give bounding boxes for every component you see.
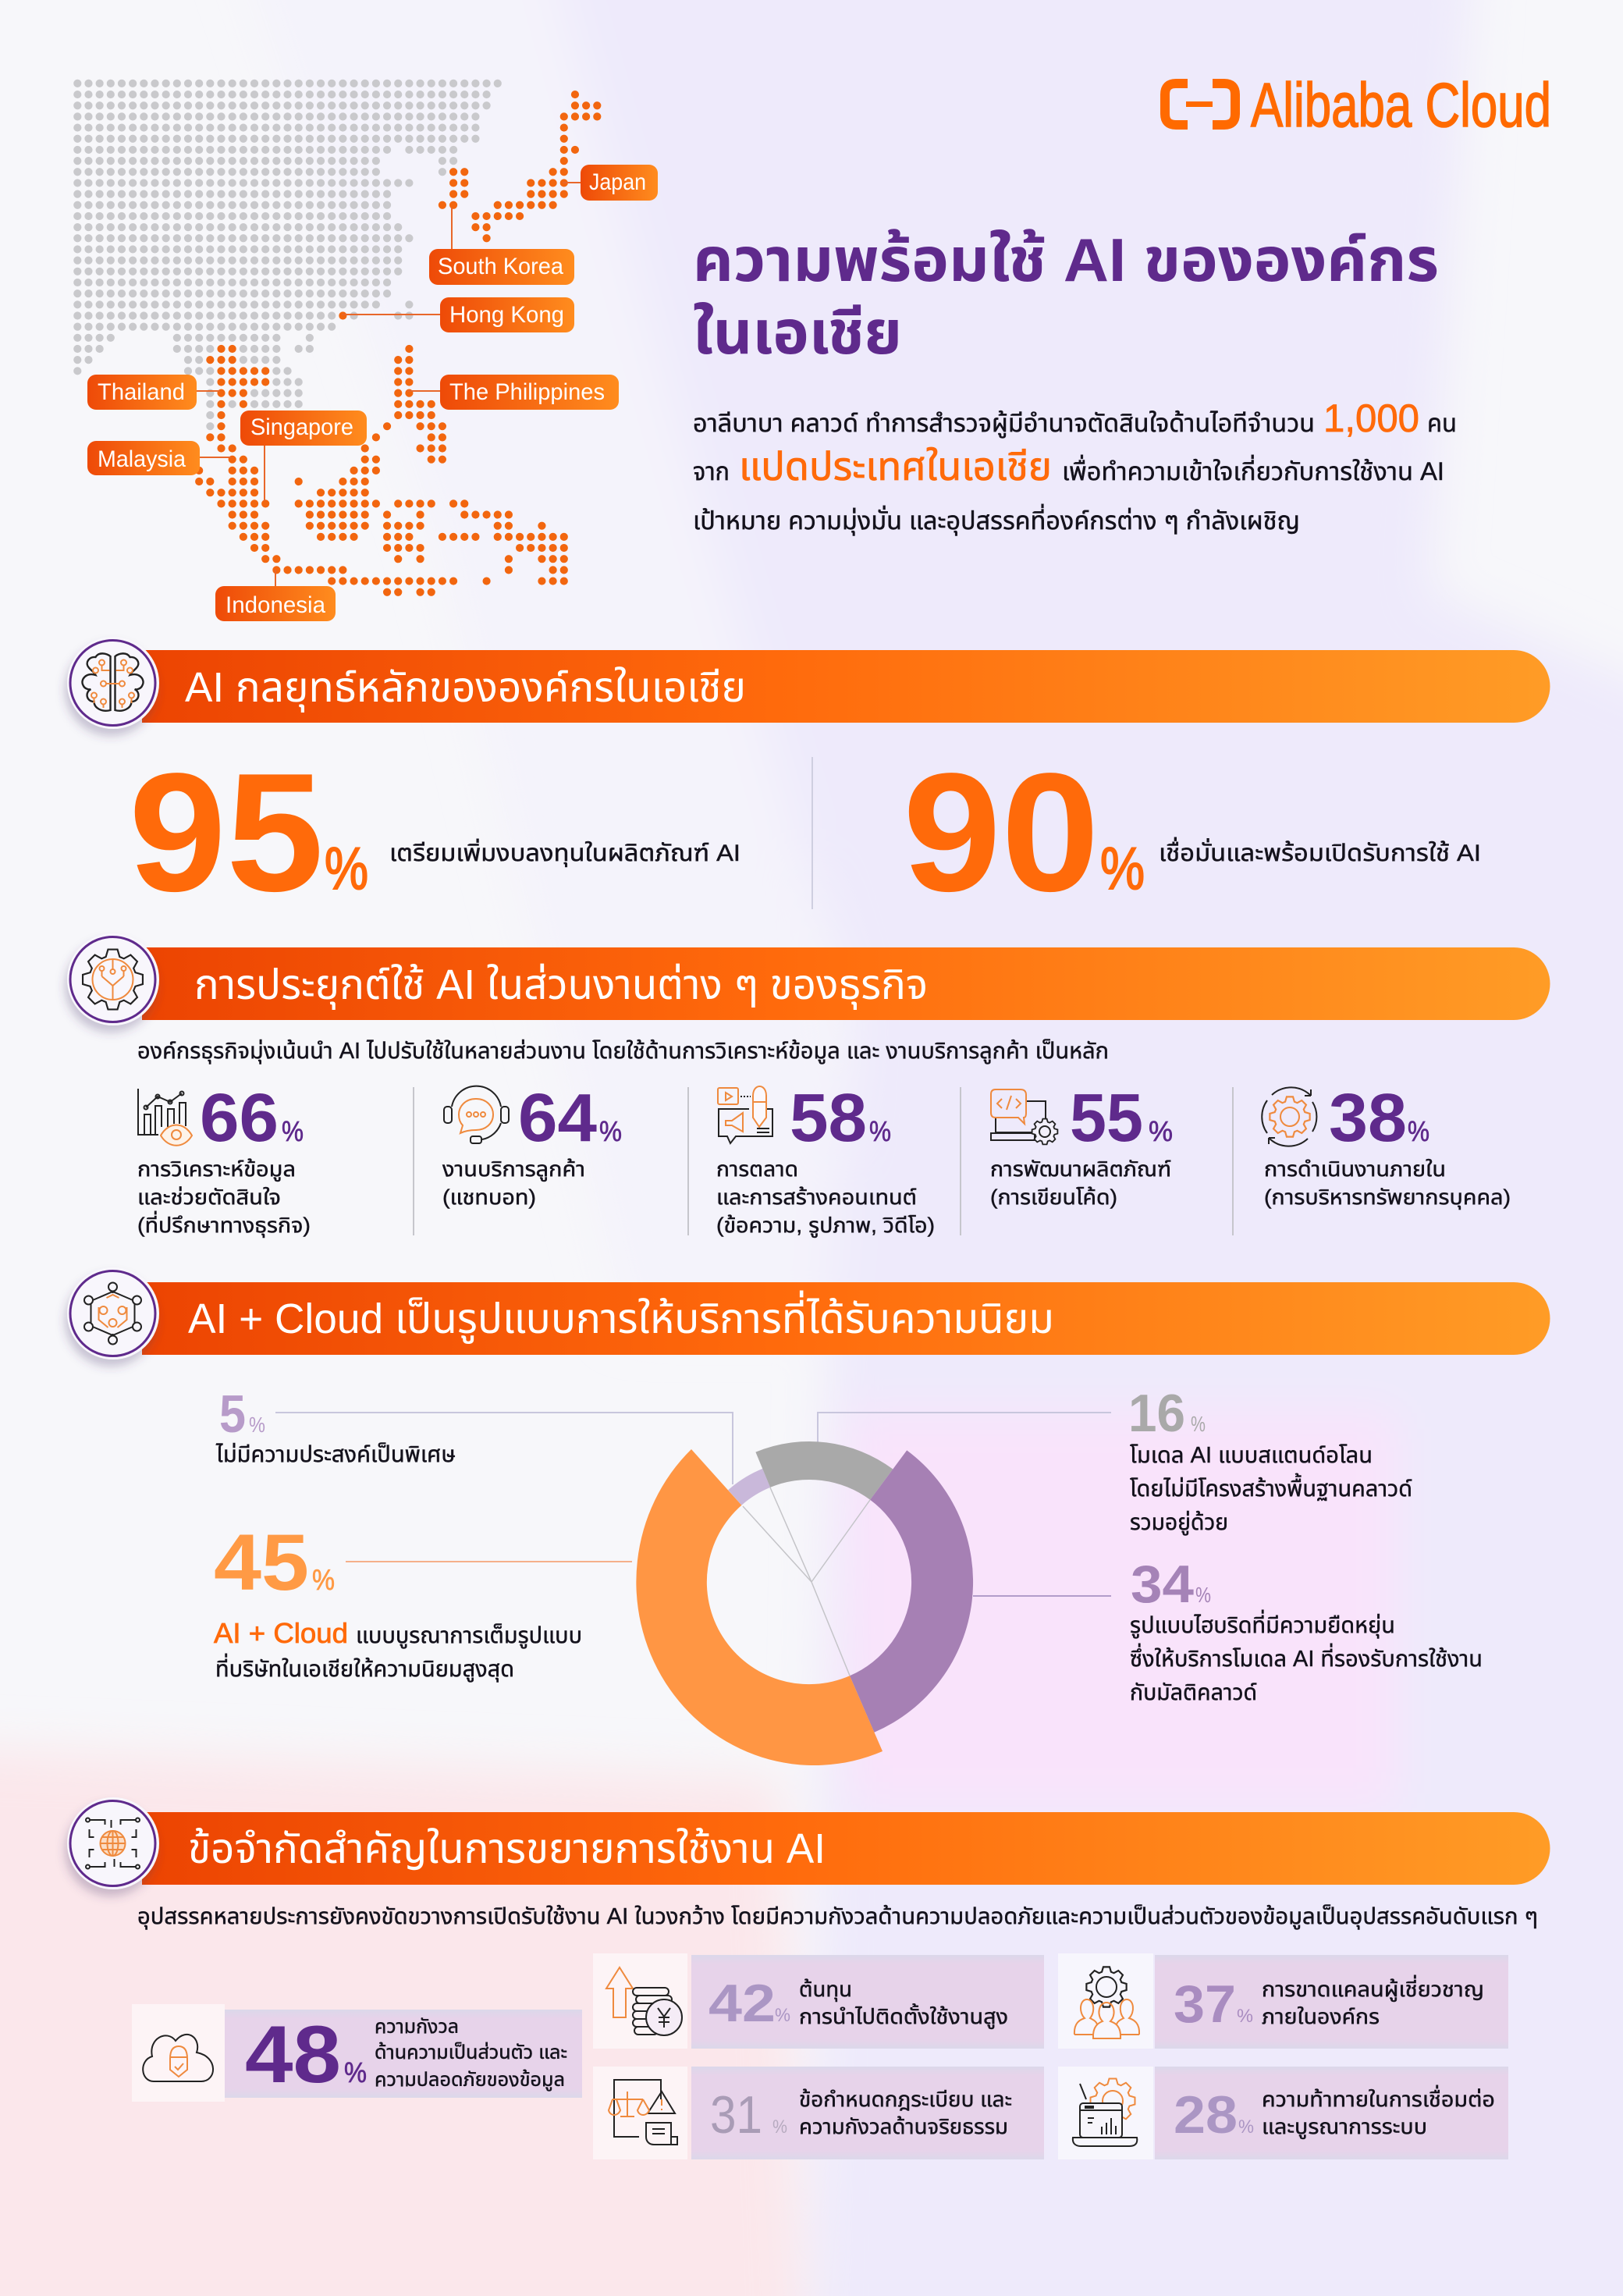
section header 3: AI + Cloud เป็นรูปแบบการให้บริการที่ได้รับความนิยม	[188, 1290, 1054, 1344]
label: Hong Kong	[440, 297, 574, 332]
card: regulation 31%: ข้อกำหนดกฎระเบียบ และ	[799, 2088, 1012, 2111]
stat card: marketing 58%	[716, 1080, 935, 1238]
dotted map of Asia	[77, 84, 658, 621]
icon: network	[67, 1267, 159, 1359]
stat card: product development 55%: 55	[1070, 1080, 1143, 1156]
callout: 45%: AI + Cloud	[214, 1617, 348, 1649]
orange survey country dots	[199, 94, 598, 592]
label: Malaysia: Malaysia	[98, 446, 186, 472]
stat card: product development 55%: (การเขียนโค้ด)	[990, 1185, 1117, 1209]
segment: 5%	[728, 1469, 770, 1505]
stat: 95%: 95	[129, 737, 324, 926]
callout: 34%	[1130, 1555, 1483, 1705]
stat card: customer service 64%: (แชทบอท)	[442, 1185, 536, 1209]
stat card: data analysis 66%: การวิเคราะห์ข้อมูล	[137, 1157, 296, 1182]
section 2 intro text: องค์กรธุรกิจมุ่งเน้นนำ AI ไปปรับใช้ในหลายส่วนงาน โดยใช้ด้านการวิเคราะห์ข้อมูล และ งานบริการลูกค้า เป็นหลัก	[137, 1039, 1109, 1064]
callout: 34%: รูปแบบไฮบริดที่มีความยืดหยุ่น	[1130, 1609, 1395, 1639]
intro text block: อาลีบาบา คลาวด์ ทำการสำรวจผู้มีอำนาจตัดสินใจด้านไอทีจำนวน	[693, 409, 1315, 439]
section header 2	[67, 933, 1550, 1025]
callout: 16%	[1128, 1384, 1412, 1536]
stat card: customer service 64%: 64	[518, 1080, 597, 1156]
icon: globe circuit	[67, 1797, 159, 1889]
intro text block: จาก	[693, 457, 730, 485]
label: Thailand: Thailand	[98, 379, 185, 405]
label: Singapore: Singapore	[250, 414, 353, 440]
card: talent shortage 37%: ภายในองค์กร	[1262, 2005, 1380, 2028]
stat card: customer service 64%: งานบริการลูกค้า	[442, 1157, 585, 1182]
segment: 16%	[755, 1441, 893, 1500]
leader lines	[275, 1413, 1111, 1484]
card: cost 42%	[593, 1953, 1044, 2049]
callout: 5%: 5	[219, 1384, 246, 1444]
callout: 16%: โดยไม่มีโครงสร้างพื้นฐานคลาวด์	[1130, 1473, 1412, 1502]
card: privacy and security 48%: ความปลอดภัยของข้อมูล	[375, 2069, 565, 2092]
section header 4	[67, 1797, 1550, 1889]
section header 2: การประยุกต์ใช้ AI ในส่วนงานต่าง ๆ ของธุรกิจ	[194, 961, 928, 1010]
intro text block: 1,000	[1323, 396, 1419, 440]
stat: 90%: 90	[903, 737, 1099, 926]
callout: 45%: 45	[214, 1518, 309, 1607]
stat: 90%: เชื่อมั่นและพร้อมเปิดรับการใช้ AI	[1159, 837, 1481, 866]
segment: 45%	[636, 1449, 883, 1765]
card: privacy and security 48%: %	[344, 2056, 367, 2088]
label: Singapore	[240, 411, 367, 446]
stat card: internal operations 38%: %	[1408, 1115, 1429, 1147]
card: cost 42%: 42	[709, 1974, 776, 2033]
section header 1: AI กลยุทธ์หลักขององค์กรในเอเชีย	[185, 664, 746, 713]
card: cost 42%: ต้นทุน	[799, 1978, 852, 2002]
card: cost 42%: การนำไปติดตั้งใช้งานสูง	[799, 2003, 1008, 2029]
callout: 16%: โมเดล AI แบบสแตนด์อโลน	[1130, 1443, 1373, 1468]
icon: gear with cycle arrows	[1262, 1087, 1316, 1146]
logo: Alibaba Cloud	[1165, 70, 1551, 140]
card: privacy and security 48%: ความกังวล	[375, 2016, 459, 2038]
donut chart	[275, 1413, 1111, 1765]
stat card: data analysis 66%: (ที่ปรึกษาทางธุรกิจ)	[137, 1210, 311, 1238]
callout: 45%	[214, 1518, 582, 1683]
icon: AI brain	[67, 637, 159, 729]
intro text block: คน	[1427, 409, 1457, 437]
intro text block: เพื่อทำความเข้าใจเกี่ยวกับการใช้งาน AI	[1062, 454, 1444, 485]
stat: 95%	[129, 737, 740, 926]
section header 1	[67, 637, 1550, 729]
title	[693, 226, 1439, 367]
card: integration 28%: %	[1238, 2117, 1254, 2138]
label: The Philippines: The Philippines	[449, 379, 605, 405]
title: ความพร้อมใช้ AI ขององค์กร	[693, 226, 1439, 294]
card: privacy and security 48%: ด้านความเป็นส่วนตัว และ	[375, 2042, 567, 2063]
section header 4: ข้อจำกัดสำคัญในการขยายการใช้งาน AI	[188, 1825, 826, 1872]
stat: 95%: %	[325, 836, 368, 902]
card: privacy and security 48%	[132, 2004, 582, 2102]
card: integration 28%: 28	[1174, 2085, 1238, 2145]
card: privacy and security 48%: 48	[245, 2010, 341, 2100]
label: Hong Kong: Hong Kong	[449, 302, 564, 328]
stat card: internal operations 38%: (การบริหารทรัพยากรบุคคล)	[1264, 1185, 1511, 1210]
callout: 45%: แบบบูรณาการเต็มรูปแบบ	[356, 1623, 582, 1649]
card: regulation 31%: ความกังวลด้านจริยธรรม	[799, 2115, 1008, 2138]
card: regulation 31%: 31	[710, 2085, 762, 2145]
stat: 90%	[903, 737, 1481, 926]
card: cost 42%: %	[775, 2005, 790, 2026]
card: talent shortage 37%: 37	[1174, 1974, 1236, 2034]
callout: 5%	[215, 1384, 456, 1467]
callout: 34%: %	[1195, 1583, 1211, 1607]
grey land dots	[77, 84, 499, 426]
label: Japan: Japan	[589, 169, 646, 195]
label: Thailand	[87, 375, 197, 410]
intro text block	[693, 396, 1457, 535]
stat card: data analysis 66%	[137, 1080, 311, 1238]
stat: 90%: %	[1100, 836, 1145, 902]
icon: AI gear	[67, 933, 159, 1025]
callout: 34%: กับมัลติคลาวด์	[1130, 1680, 1257, 1705]
leader lines	[197, 183, 581, 586]
label: Indonesia	[215, 586, 336, 621]
stat card: marketing 58%: (ข้อความ, รูปภาพ, วิดีโอ)	[716, 1214, 935, 1238]
label: Malaysia	[87, 441, 200, 475]
stat card: marketing 58%: 58	[790, 1080, 867, 1156]
card: regulation 31%	[593, 2067, 1044, 2159]
stat card: product development 55%: %	[1149, 1115, 1173, 1147]
card: integration 28%: และบูรณาการระบบ	[1262, 2115, 1427, 2139]
segment lines	[743, 1487, 870, 1676]
card: talent shortage 37%: การขาดแคลนผู้เชี่ยวชาญ	[1262, 1974, 1484, 2002]
stat card: product development 55%	[990, 1080, 1173, 1209]
stat card: data analysis 66%: และช่วยตัดสินใจ	[137, 1185, 281, 1209]
stat: 95%: เตรียมเพิ่มงบลงทุนในผลิตภัณฑ์ AI	[389, 838, 740, 867]
label: South Korea: South Korea	[438, 254, 563, 279]
section header 3	[67, 1267, 1550, 1359]
card: integration 28%: ความท้าทายในการเชื่อมต่อ	[1262, 2085, 1495, 2111]
stat card: marketing 58%: การตลาด	[716, 1157, 798, 1181]
segment: 34%	[850, 1450, 973, 1733]
stat card: internal operations 38%: การดำเนินงานภายใน	[1264, 1157, 1446, 1181]
intro text block: แปดประเทศในเอเชีย	[739, 445, 1052, 489]
stat card: data analysis 66%: 66	[200, 1080, 279, 1156]
callout: 16%: %	[1191, 1412, 1206, 1436]
icon: chart and eye	[138, 1089, 192, 1146]
intro text block: เป้าหมาย ความมุ่งมั่น และอุปสรรคที่องค์กรต่าง ๆ กำลังเผชิญ	[693, 503, 1300, 535]
icon: headset chat	[444, 1086, 509, 1143]
section 4 intro text: อุปสรรคหลายประการยังคงขัดขวางการเปิดรับใช้งาน AI ในวงกว้าง โดยมีความกังวลด้านความปลอดภัยและความเป็นส่วนตัวของข้อมูลเป็นอุปสรรคอันดับแรก ๆ	[137, 1904, 1538, 1930]
callout: 34%: ซึ่งให้บริการโมเดล AI ที่รองรับการใช้งาน	[1130, 1643, 1483, 1672]
label: South Korea	[429, 249, 574, 285]
stat card: data analysis 66%: %	[282, 1115, 304, 1147]
stat card: customer service 64%: %	[599, 1115, 622, 1147]
callout: 5%: ไม่มีความประสงค์เป็นพิเศษ	[215, 1442, 456, 1467]
icon: cloud lock	[143, 2035, 213, 2081]
stat card: marketing 58%: %	[869, 1115, 891, 1147]
icon: coins and arrow	[606, 1967, 682, 2035]
card: talent shortage 37%: %	[1237, 2006, 1253, 2027]
icon: laptop and gear	[1073, 2079, 1137, 2146]
icon: coding laptop	[991, 1089, 1057, 1144]
stat card: internal operations 38%: 38	[1329, 1080, 1407, 1156]
label: Japan	[581, 165, 658, 201]
label: Indonesia: Indonesia	[226, 592, 325, 618]
callout: 16%: รวมอยู่ด้วย	[1130, 1510, 1228, 1536]
stat card: marketing 58%: และการสร้างคอนเทนต์	[716, 1185, 917, 1209]
label: The Philippines	[440, 375, 619, 410]
stat card: customer service 64%	[442, 1080, 622, 1209]
callout: 45%: ที่บริษัทในเอเชียให้ความนิยมสูงสุด	[215, 1653, 514, 1683]
icon: scales and warning	[609, 2080, 677, 2145]
stat card: internal operations 38%	[1262, 1080, 1511, 1210]
callout: 34%: 34	[1131, 1555, 1194, 1614]
callout: 45%: %	[312, 1564, 335, 1596]
icon: gear and team	[1074, 1967, 1139, 2038]
callout: 5%: %	[249, 1413, 265, 1437]
callout: 16%: 16	[1128, 1384, 1185, 1443]
card: talent shortage 37%	[1058, 1953, 1508, 2049]
card: regulation 31%: %	[772, 2117, 787, 2138]
title: ในเอเชีย	[693, 298, 902, 367]
icon: marketing and content	[718, 1086, 772, 1143]
stat card: product development 55%: การพัฒนาผลิตภัณฑ์	[990, 1157, 1171, 1181]
card: integration 28%	[1058, 2067, 1508, 2159]
